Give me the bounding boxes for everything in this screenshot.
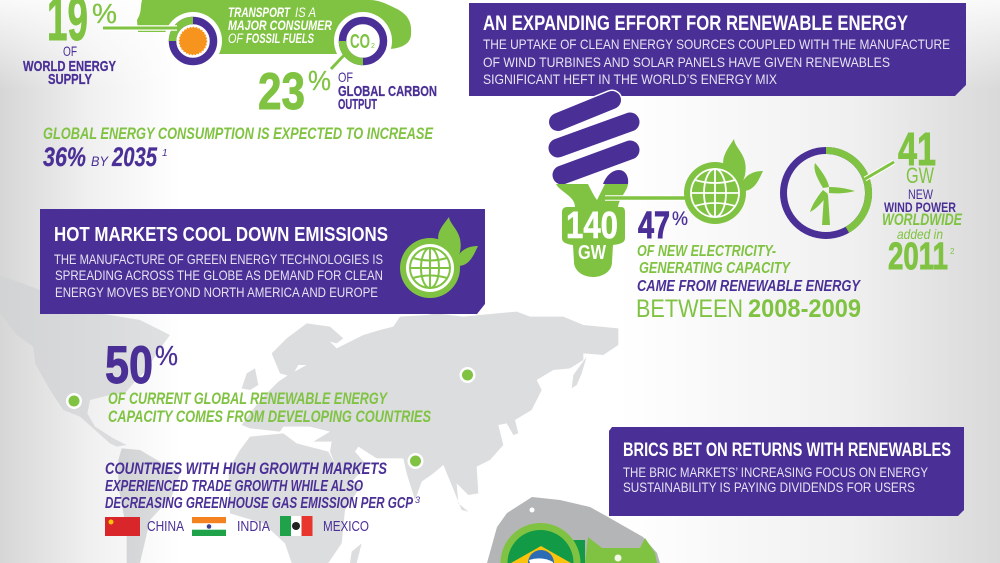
stat: 19% of world energy supply: WORLD ENERGY — [23, 58, 116, 75]
right wheel: CO2 ring: 2 — [371, 43, 375, 50]
high growth markets: 3 — [415, 495, 420, 505]
map: eurasia and africa — [228, 312, 618, 563]
global consumption forecast: 36% — [43, 142, 86, 172]
panel: hot markets cool down emissions — [40, 209, 485, 314]
global consumption forecast: BY — [91, 153, 110, 169]
global consumption forecast: 1 — [162, 148, 168, 159]
connector: turbine ring to 41 GW — [865, 162, 894, 179]
high growth markets: EXPERIENCED TRADE GROWTH WHILE ALSO — [105, 478, 363, 495]
panel body: THE BRIC MARKETS’ INCREASING FOCUS ON ENERGY — [623, 464, 929, 480]
stat: 41 GW wind power: added in — [897, 226, 943, 242]
car body — [137, 0, 411, 54]
right wheel: CO2 ring — [334, 12, 392, 70]
global consumption forecast: 2035 — [111, 142, 158, 172]
global consumption forecast: GLOBAL ENERGY CONSUMPTION IS EXPECTED TO INCREASE — [43, 124, 433, 143]
stat: 50% renewable capacity: % — [155, 340, 178, 371]
global consumption forecast — [43, 124, 433, 172]
connector: 19% to wheel — [103, 25, 177, 31]
car caption: TRANSPORT — [228, 4, 291, 20]
connector: bulb to globe — [605, 195, 690, 201]
stat: 23% of global carbon output: GLOBAL CARBON — [338, 83, 437, 100]
bulb spiral — [558, 100, 630, 175]
stat: 47% of new capacity: 47 — [638, 205, 670, 247]
connector: 23% to wheel — [331, 52, 347, 69]
stat: 41 GW wind power: 2 — [950, 247, 955, 256]
bulb spiral lower stub — [603, 170, 628, 184]
brazil flag badge — [500, 523, 580, 563]
stat: 47% of new capacity: % — [672, 209, 688, 230]
panel body: SIGNIFICANT HEFT IN THE WORLD’S ENERGY MIX — [483, 71, 778, 87]
stat: 47% of new capacity — [636, 205, 861, 323]
high growth markets — [105, 460, 420, 536]
right wheel: CO2 ring: CO — [350, 31, 370, 53]
stat: 47% of new capacity: OF NEW ELECTRICITY- — [637, 243, 776, 260]
stat: 41 GW wind power — [882, 123, 963, 278]
stat: 23% of global carbon output — [258, 63, 437, 121]
car caption: IS A — [295, 4, 316, 20]
map location dots — [66, 367, 476, 469]
stat: 50% renewable capacity — [105, 336, 431, 426]
icon: green globe — [400, 217, 478, 298]
brazil green — [585, 537, 657, 563]
stat: 19% of world energy supply: SUPPLY — [48, 71, 92, 88]
stat: 41 GW wind power: WORLDWIDE — [882, 211, 963, 229]
left wheel: energy share ring with sun — [164, 12, 222, 70]
car caption — [228, 4, 333, 46]
panel body: ENERGY MOVES BEYOND NORTH AMERICA AND EUROPE — [55, 284, 378, 300]
car caption: FOSSIL FUELS — [246, 30, 314, 46]
stat: 23% of global carbon output: 23 — [258, 63, 305, 121]
icon: energy saving bulb: 140 — [566, 205, 618, 247]
stat: 47% of new capacity: CAME FROM RENEWABLE ENERGY — [637, 278, 861, 295]
stat: 41 GW wind power: GW — [906, 163, 934, 188]
stat: 47% of new capacity: GENERATING CAPACITY — [639, 260, 791, 277]
icon: india flag — [192, 517, 226, 536]
icon: green globe — [684, 139, 763, 224]
high growth markets: MEXICO — [323, 518, 369, 535]
brazil dark green band — [573, 540, 585, 563]
car caption: MAJOR CONSUMER — [228, 17, 333, 33]
map: the americas — [0, 275, 180, 563]
icon: energy saving bulb — [556, 100, 630, 277]
panel body — [54, 251, 383, 300]
stat: 19% of world energy supply: OF — [63, 43, 77, 59]
high growth markets: DECREASING GREENHOUSE GAS EMISSION PER GCP — [105, 495, 413, 512]
stat: 41 GW wind power: 2011 — [888, 236, 948, 278]
car illustration — [137, 0, 411, 70]
panel body: SUSTAINABILITY IS PAYING DIVIDENDS FOR USERS — [623, 479, 915, 495]
panel heading: HOT MARKETS COOL DOWN EMISSIONS — [54, 224, 388, 246]
panel body: OF WIND TURBINES AND SOLAR PANELS HAVE GIVEN RENEWABLES — [483, 54, 890, 70]
high growth markets: CHINA — [147, 518, 184, 535]
panel body — [483, 36, 950, 87]
high growth markets: INDIA — [237, 518, 270, 535]
world map — [0, 275, 660, 563]
stat: 50% renewable capacity: CAPACITY COMES FROM DEVELOPING COUNTRIES — [108, 407, 431, 426]
panel body — [623, 464, 929, 495]
stat: 47% of new capacity: 2008-2009 — [748, 295, 861, 323]
stat: 23% of global carbon output: OF — [338, 69, 353, 85]
icon: energy saving bulb: GW — [578, 242, 606, 264]
icon: china flag — [105, 517, 140, 536]
stat: 50% renewable capacity: OF CURRENT GLOBAL RENEWABLE ENERGY — [108, 389, 388, 408]
high growth markets: COUNTRIES WITH HIGH GROWTH MARKETS — [105, 460, 387, 478]
stat: 19% of world energy supply — [23, 0, 117, 88]
stat: 41 GW wind power: WIND POWER — [884, 199, 956, 215]
panel: brics bet on returns — [609, 427, 964, 516]
map: south america detail — [487, 497, 660, 563]
stat: 50% renewable capacity: 50 — [105, 336, 153, 395]
stat: 23% of global carbon output: OUTPUT — [338, 96, 377, 113]
icon: wind turbine ring — [784, 150, 869, 236]
stat: 47% of new capacity: BETWEEN — [636, 295, 743, 323]
white dot on brazil — [614, 554, 622, 562]
car caption: OF — [228, 30, 244, 46]
panel body: THE MANUFACTURE OF GREEN ENERGY TECHNOLOGIES IS — [54, 251, 383, 267]
panel: expanding effort for renewable energy — [469, 3, 966, 96]
panel body: SPREADING ACROSS THE GLOBE AS DEMAND FOR CLEAN — [55, 267, 383, 283]
bulb white outline — [558, 100, 612, 122]
stat: 41 GW wind power: NEW — [908, 186, 934, 202]
stat: 41 GW wind power: 41 — [898, 123, 936, 175]
bulb green base — [556, 184, 628, 277]
icon: mexico flag — [280, 516, 312, 536]
stat: 23% of global carbon output: % — [308, 65, 331, 96]
